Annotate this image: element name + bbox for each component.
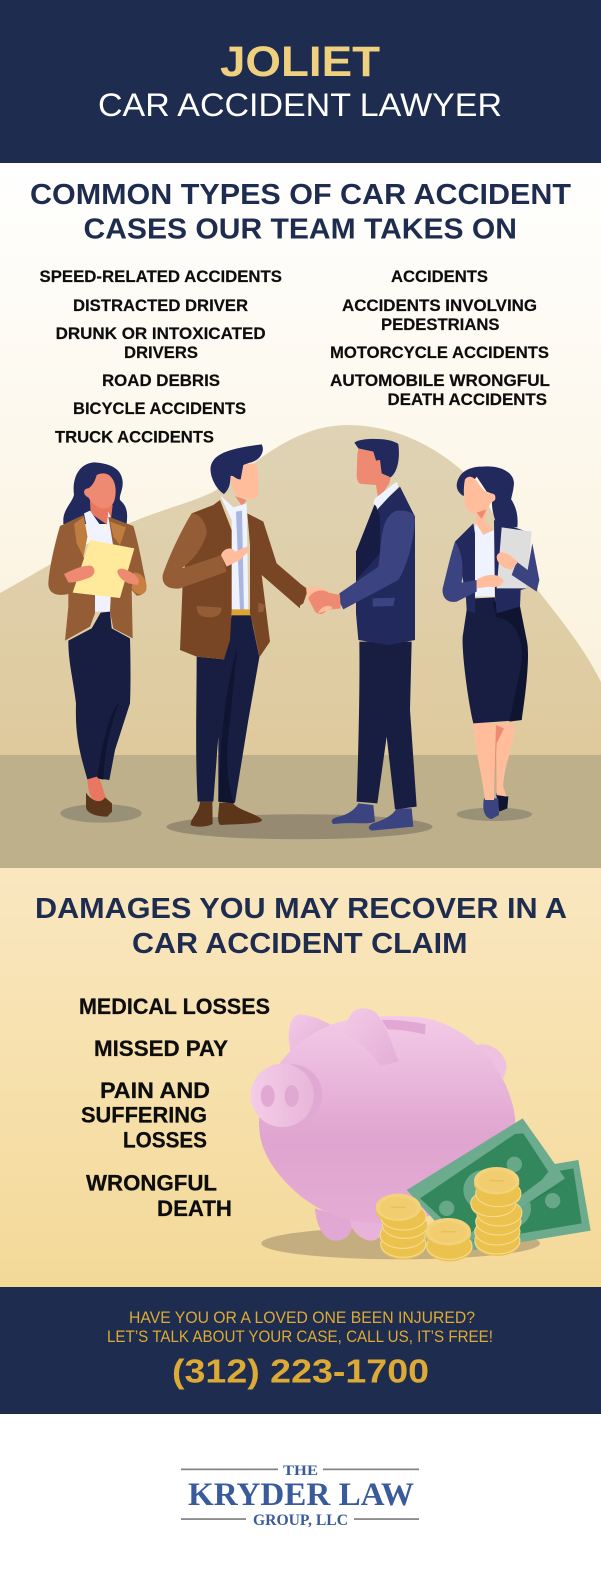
list: left column accident types: DISTRACTED DRIVER — [73, 296, 248, 315]
panel: damages — [0, 868, 601, 1287]
list: damages: DEATH — [157, 1196, 232, 1221]
heading: common types: COMMON TYPES OF CAR ACCIDENT — [30, 179, 571, 211]
illustration: man in navy suit — [308, 439, 417, 831]
hill background — [0, 425, 601, 756]
list: right column accident types: AUTOMOBILE WRONGFUL — [330, 371, 550, 390]
ground — [0, 755, 601, 868]
phone number: (312) 223-1700 — [172, 1353, 429, 1390]
call to action text — [107, 1309, 493, 1346]
list: left column accident types — [40, 267, 282, 446]
list: right column accident types: PEDESTRIANS — [381, 315, 500, 334]
list: right column accident types: ACCIDENTS — [391, 267, 488, 286]
title: Joliet: JOLIET — [220, 38, 380, 86]
list: damages: PAIN AND — [100, 1078, 210, 1103]
list: damages: WRONGFUL — [86, 1171, 217, 1196]
list: left column accident types: TRUCK ACCIDENTS — [55, 428, 214, 446]
list: left column accident types: DRUNK OR INTOXICATED — [56, 324, 266, 343]
list: damages — [79, 994, 270, 1221]
panel: call to action — [0, 1287, 601, 1414]
list: right column accident types: MOTORCYCLE ACCIDENTS — [330, 343, 549, 362]
list: left column accident types: SPEED-RELATED ACCIDENTS — [40, 267, 282, 286]
heading: damages — [35, 893, 567, 960]
illustration: piggy bank with cash and coins — [251, 1008, 591, 1261]
list: left column accident types: BICYCLE ACCIDENTS — [73, 399, 246, 418]
list: damages: MEDICAL LOSSES — [79, 994, 270, 1019]
list: right column accident types — [330, 267, 550, 409]
heading: damages: DAMAGES YOU MAY RECOVER IN A — [35, 893, 567, 925]
list: damages: LOSSES — [123, 1128, 207, 1153]
panel: header — [0, 0, 601, 163]
heading: damages: CAR ACCIDENT CLAIM — [132, 928, 468, 960]
logo: The Kryder Law Group: THE — [283, 1463, 318, 1479]
ground shadow under the two men — [166, 814, 432, 839]
heading: common types — [30, 179, 571, 246]
illustration: woman in brown jacket with paper — [48, 462, 147, 823]
illustration: handshake arm of brown suit — [298, 582, 330, 607]
list: right column accident types: ACCIDENTS INVOLVING — [342, 296, 537, 315]
logo: The Kryder Law Group — [181, 1463, 419, 1529]
list: damages: MISSED PAY — [94, 1036, 228, 1061]
subtitle: CAR ACCIDENT LAWYER — [98, 87, 502, 123]
logo: The Kryder Law Group: GROUP, LLC — [253, 1512, 348, 1529]
call to action text: LET’S TALK ABOUT YOUR CASE, CALL US, IT’S FREE! — [107, 1328, 493, 1346]
list: left column accident types: ROAD DEBRIS — [102, 371, 220, 390]
logo: The Kryder Law Group: KRYDER LAW — [188, 1477, 414, 1513]
list: damages: SUFFERING — [81, 1103, 207, 1128]
list: right column accident types: DEATH ACCIDENTS — [388, 390, 547, 409]
heading: common types: CASES OUR TEAM TAKES ON — [84, 214, 517, 246]
panel: common types of cases — [0, 163, 601, 868]
list: left column accident types: DRIVERS — [124, 343, 198, 362]
illustration: woman in navy suit with tablet — [443, 466, 539, 821]
illustration: man in brown suit — [163, 444, 300, 827]
call to action text: HAVE YOU OR A LOVED ONE BEEN INJURED? — [129, 1309, 475, 1327]
